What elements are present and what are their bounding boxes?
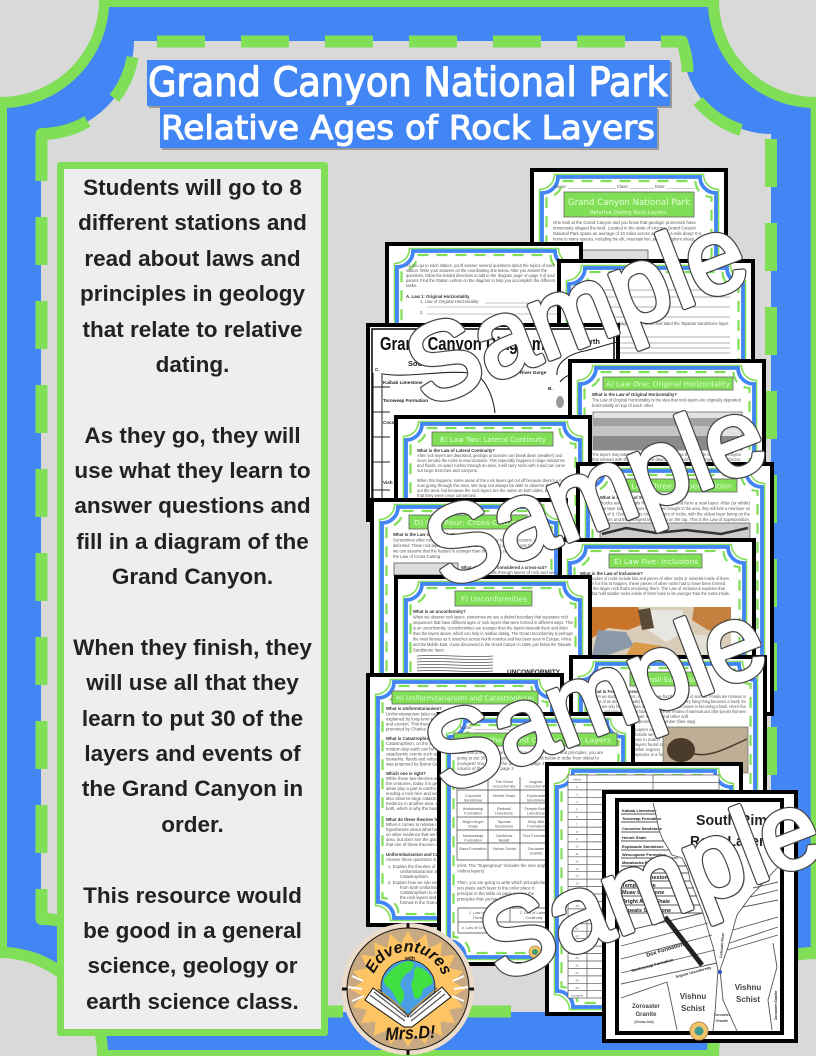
text block: description: science, geology or: [87, 953, 298, 978]
page: Uniformitarianism and Catastrophism: [368, 675, 562, 925]
page: South Rim rock layers: Muav Limestone: [622, 890, 664, 896]
page: dating rock layers worksheet: youngest! You can use the diagram on page 3 to help. Write them in the first: [457, 761, 602, 766]
page: station questions one: [387, 244, 581, 494]
watermark: Sample 3: Sample: [409, 576, 781, 815]
page: Law Four: Sometimes after rock layers form, they may be split by faults, intrusions, or: [393, 538, 539, 542]
page: Unconformities: UNCONFORMITY: [507, 669, 561, 676]
page: Law Two: and floods. As water rushes through an area, it will carry rocks with it and can carve: [417, 463, 566, 468]
text block: description: the Grand Canyon in: [82, 776, 303, 801]
page: dating rock layers worksheet: Formation: [464, 838, 482, 842]
page: dating rock layers worksheet: principle in the table on page 2 using the: [457, 891, 535, 896]
logo text: with: [404, 956, 415, 962]
page: Uniformitarianism and Catastrophism: and erosion. This theory was: [386, 722, 441, 726]
page: Law Five: What is the Law of Inclusions?: [580, 571, 643, 576]
page: ordering table: 28: [575, 978, 579, 982]
page: ordering table: 19: [575, 912, 579, 916]
text block: description: answer questions and: [74, 493, 311, 518]
page: Law One: The Law of Original Horizontality is the idea that rock layers are originally deposited: [592, 398, 742, 402]
page: Fossil Succession: tissues that are perfectly preserved in amber (free sap).: [591, 719, 697, 724]
logo text: Edventures: [366, 942, 450, 974]
page: South Rim rock layers: Hermit Shale: [622, 835, 647, 840]
page: ordering table: 13: [575, 867, 579, 871]
page: Law Five: Some bodies of rocks include bits and pieces of other rocks or minerals inside of them.: [580, 576, 730, 581]
page: ordering table: 2: [576, 785, 578, 789]
page: ordering table: 6: [576, 815, 578, 819]
text block: description: order.: [161, 812, 224, 837]
page: Uniformitarianism and Catastrophism: cataclysmic events such as: [386, 752, 438, 756]
page: South Rim rock layers: Wescogame Formation: [622, 852, 666, 857]
page: Fossil Succession: G) Fossil Succession: [634, 675, 699, 684]
page: dating rock layers worksheet: Formation: [464, 810, 482, 816]
page: South Rim rock layers: Angular Unconformity: [675, 966, 712, 979]
page: ordering table: 9: [576, 837, 578, 841]
page: ordering table: 14: [575, 874, 579, 878]
page: dating rock layers worksheet: Continuity: [525, 915, 543, 920]
page: Law Five: In order for this to happen, these pieces of other rocks had to have been formed: [580, 581, 726, 586]
logo text: Mrs.D!: [385, 1022, 436, 1044]
page: station questions two: On your diagram, find, draw and label the Tapeats Sandstone layer.: [601, 321, 729, 326]
page: station questions one: packet. Find the Station Letters on the diagram to help you accomplish the different: [406, 278, 556, 283]
text block: description: fill in a diagram of the: [76, 529, 309, 554]
page: Uniformitarianism and Catastrophism: Uniformitarianism (also called Gradualism): [386, 712, 468, 716]
page: Law Two: [396, 417, 590, 667]
page: Uniformitarianism and Catastrophism: Uniformitarianism and: [400, 869, 442, 874]
page: dating rock layers worksheet: Sandstone: [464, 798, 482, 802]
page: dating rock layers worksheet: Temple Butte: [525, 806, 547, 811]
page: ordering table: [547, 764, 741, 1014]
page: dating rock layers worksheet: Bass Formation: [459, 846, 487, 851]
page: Law Four: When magma cuts through layers of rock and see a rock: [461, 570, 570, 575]
page: Unconformities: When we observe rock layers, sometimes we see a distinct boundary that separates rock: [413, 614, 569, 620]
logo: Edventures with Mrs. D: [342, 923, 474, 1055]
page: ordering table: Oldest: [573, 778, 582, 782]
page: South Rim rock layers: Granite: [635, 1012, 657, 1018]
page: dating rock layers worksheet: Limestone: [495, 810, 513, 816]
page: Uniformitarianism and Catastrophism: H) Uniformitarianism and Catastrophism: [396, 694, 534, 702]
page: Fossil Succession: use to match: [635, 737, 660, 742]
page: Law Two: What is the Law of Lateral Continuity?: [417, 448, 495, 453]
page: Uniformitarianism and Catastrophism: evidence in another area, we can: [386, 801, 450, 806]
page: dating rock layers worksheet: Watahomigi: [463, 806, 483, 811]
text block: description: dating.: [156, 352, 229, 377]
page: Uniformitarianism and Catastrophism: modern-day earth can be explained: [386, 746, 454, 752]
text block: description: different stations and: [78, 210, 307, 235]
page: ordering table: 27: [575, 971, 579, 975]
page: Uniformitarianism and Catastrophism: While these two theories seem: [386, 776, 445, 781]
page: ordering table: 3: [576, 792, 578, 796]
page: Fossil Succession: fossils are only found in certain layers, especially when it comes to becoming a fossil. Here's five: [591, 704, 747, 709]
page: ordering table: 20: [575, 919, 579, 923]
page: Law Two: When this happens, some areas of the rock layers get cut off because there's a river: [417, 478, 568, 483]
text block: description: be good in a general: [83, 918, 302, 943]
page: Grand Canyon diagram: River Gorge: [520, 370, 547, 375]
page: Uniformitarianism and Catastrophism: Catastrophism.: [400, 874, 429, 879]
page: Law Three: that layer hardens, if more minerals are brought to the area, they will form a new layer on: [600, 506, 751, 511]
page: Law Four: D) Law Four: Cross-Cutting: [414, 518, 522, 527]
page: ordering table: 21: [575, 926, 579, 930]
text block: description: As they go, they will: [84, 423, 301, 448]
page: South Rim rock layers: Esplanade Sandstone: [622, 844, 664, 849]
page: Uniformitarianism and Catastrophism: the centuries, today it is generally: [386, 781, 451, 786]
page: South Rim rock layers: (Cross-Cut): [634, 1020, 654, 1024]
page: South Rim rock layers: Schist: [736, 995, 760, 1004]
page: dating rock layers worksheet: Then, you are going to write which principle/law: [457, 880, 548, 885]
text block: description: that relate to relative: [82, 316, 303, 342]
page: Uniformitarianism and Catastrophism: hypothesize about what happened: [386, 827, 452, 832]
page: Unconformities: F) Unconformities: [461, 594, 527, 604]
page: South Rim rock layers: Zoroaster: [632, 1004, 660, 1010]
page: ordering table: 5: [576, 808, 578, 812]
title: Grand Canyon National Park: [148, 60, 669, 106]
page: cover worksheet: home to many species, including the elk, mountain lion, javelina, bighorn sheep, and: [553, 236, 704, 242]
page: dating rock layers worksheet: going to put 30 of the layers and events listed below in order from oldest to: [457, 756, 599, 760]
page: dating rock layers worksheet: column of the table on page 2: [457, 766, 514, 771]
icon: open book: [365, 987, 451, 1027]
page: cover worksheet: Grand Canyon National Park: [568, 198, 691, 208]
text block: description: learn to put 30 of the: [82, 706, 303, 731]
page: South Rim rock layers: South Rim: [696, 813, 767, 829]
page: Uniformitarianism and Catastrophism: area, but don't see the glacier: [386, 837, 443, 842]
page: dating rock layers worksheet: [439, 714, 633, 964]
page: Uniformitarianism and Catastrophism: Uniformitarianism and Catastrophism: [386, 852, 463, 857]
icon: globe: [381, 960, 435, 1014]
text block: description: use what they learn to: [74, 458, 311, 483]
page: dating rock layers worksheet: Vishnu Schist: [492, 846, 517, 851]
page: dating rock layers worksheet: Sandstone: [495, 824, 513, 828]
page: Grand Canyon diagram: C.: [375, 367, 380, 372]
text block: description: When they finish, they: [73, 635, 312, 660]
page: Uniformitarianism and Catastrophism: Catastrophism to explain: [400, 890, 448, 895]
page: dating rock layers worksheet: Zoroaster: [528, 846, 545, 851]
page: Law Three: What is the Law of Superposition?: [600, 495, 671, 500]
page: ordering table: 7: [576, 822, 578, 826]
page: Uniformitarianism and Catastrophism: Answer these questions in your: [386, 857, 446, 862]
page: South Rim rock layers: Vishnu: [735, 983, 761, 992]
page: station questions one: 2.: [420, 310, 424, 315]
page: dating rock layers worksheet: Unconformity: [525, 784, 548, 788]
page: South Rim rock layers: Rock Layers: [690, 834, 772, 850]
page: dating rock layers worksheet: Redwall: [497, 806, 511, 811]
page: Uniformitarianism and Catastrophism: the rock layers and features: [400, 895, 453, 900]
page: Law Two: After rock layers are deposited, geologic processes can break down (weather) and: [417, 453, 563, 458]
title: Relative Ages of Rock Layers: [161, 108, 655, 147]
page: South Rim rock layers: Manakacha Formation: [622, 860, 665, 865]
page: dating rock layers worksheet: 2. Law of Lateral: [520, 910, 549, 915]
page: Law Three: top of it. Over time this creates layers of rocks, with the oldest layer being on the: [600, 512, 751, 516]
page: Uniformitarianism and Catastrophism: Catastrophism, on the other: [386, 741, 440, 746]
page: ordering table: 8: [576, 830, 578, 834]
page: Law Two: out large trenches and canyons.: [417, 468, 478, 473]
page: dating rock layers worksheet: The Great: [495, 779, 514, 784]
page: ordering table: 11: [575, 852, 579, 856]
page: Unconformities: the most famous as it stretches across North America and has been seen in Europe, Africa: [413, 636, 572, 642]
page: station questions one: 1. Law of Original Horizontality:: [420, 299, 479, 304]
watermark: Sample 2: Sample: [409, 371, 781, 610]
page: cover worksheet: National Park spans an average of 10 miles across and up to a mile deep! It is: [553, 231, 702, 236]
watermark: Sample 1: Sample: [390, 189, 762, 428]
page: Law One: The layers may later become tilted or deformed, but the principle still holds as layers: [592, 452, 741, 457]
page: dating rock layers worksheet: Hermit Shale: [493, 793, 515, 798]
watermark: Sample 1: Sample: [390, 189, 762, 428]
page: dating rock layers worksheet: you place each layer in the order place it: [457, 886, 535, 890]
page: Unconformities: Sandstone layer.: [413, 648, 445, 652]
page: dating rock layers worksheet: Tapeats: [497, 819, 511, 824]
page: Uniformitarianism and Catastrophism: explained by long-term processes: [386, 716, 450, 722]
page: Law One: What is the Law of Original Horizontality?: [592, 392, 677, 397]
page: dating rock layers worksheet: Bright Angel: [463, 819, 484, 824]
page: Law Three: bottom and the youngest layer being on the top. This is the Law of Superposition.: [600, 517, 750, 522]
page: Grand Canyon diagram: Coconino: [383, 420, 404, 425]
page: Uniformitarianism and Catastrophism: also observe large catastrophic: [386, 796, 446, 801]
page: Uniformitarianism and Catastrophism: was proposed by Baron Georges: [386, 762, 449, 766]
page: South Rim rock layers: Redwall Limestone: [622, 875, 671, 881]
page: South Rim rock layers: Kaibab Limestone: [622, 808, 657, 813]
page: dating rock layers worksheet: 4. Law of Cross-Cutting: [462, 925, 502, 930]
page: South Rim rock layers: Temple Butte: [622, 883, 656, 889]
page: Law Three: [578, 464, 772, 714]
page: dating rock layers worksheet: Vishnu layers): [457, 868, 485, 874]
page: Law Four: deformed. These rock layers have something that comes along and cross-cuts them,: [393, 543, 538, 548]
page: Uniformitarianism and Catastrophism: that one of these theories is: [386, 842, 439, 847]
page: dating rock layers worksheet: Esplanade: [527, 793, 545, 798]
page: Grand Canyon diagram: North: [580, 337, 600, 346]
page: dating rock layers worksheet: Nankoweap: [463, 833, 483, 838]
page: Law Two: now going through the area. We may not always be able to observe the swiping: [417, 483, 568, 488]
page: Law Two: B) Law Two: Lateral Continuity: [440, 435, 547, 444]
page: dating rock layers worksheet: Dating the Grand Canyon Rock Layers: [461, 736, 611, 744]
page: Law Five: rocks that hold smaller rocks inside of them have to be younger than the rocks inside.: [580, 591, 730, 596]
page: dating rock layers worksheet: Sixty Mile: [528, 819, 544, 824]
page: ordering table: 10: [575, 844, 579, 848]
page: dating rock layers worksheet: Coconino: [465, 793, 481, 798]
page: Law Five: E) Law Five: Inclusions: [614, 557, 698, 566]
page: Law Three: Rocks and minerals harden into rock and form a new layer. After (or while): [600, 500, 751, 506]
photo: rock inclusions: [592, 607, 731, 655]
page: ordering table: 4: [576, 800, 578, 804]
text block: description: This resource would: [83, 882, 302, 908]
page: South Rim rock layers: Dox Formation: [646, 942, 685, 959]
page: ordering table: Youngest: [571, 994, 583, 998]
page: dating rock layers worksheet: Sandstone: [527, 798, 545, 802]
page: Uniformitarianism and Catastrophism: eroding a rock face and we can: [386, 791, 446, 796]
page: Fossil Succession: When we study rock layers, sometimes we find the remains of animals. Fossils are remains or: [591, 694, 746, 699]
page: dating rock layers worksheet: Formation: [527, 824, 545, 828]
page: Uniformitarianism and Catastrophism: on other evidence that we have: [386, 832, 446, 837]
page: dating rock layers worksheet: Shale: [468, 824, 478, 828]
page: Grand Canyon diagram: Kaibab Limestone: [383, 380, 423, 385]
page: Unconformities: What is an unconformity?: [413, 609, 466, 614]
text block: description: layers and events of: [84, 741, 301, 766]
page: South Rim rock layers: [604, 792, 796, 1041]
page: station questions one: As you go to each station, you'll answer several questions about the topics of each: [406, 263, 556, 268]
page: South Rim rock layers: Zoroaster: [714, 1013, 731, 1017]
page: dating rock layers worksheet: Granite: [530, 850, 542, 856]
page: Uniformitarianism and Catastrophism: both, which is why the basic ideas: [386, 806, 451, 811]
page: Law Two: move (erode) the rocks to new locations. This especially happens in large rainstorms: [417, 458, 565, 463]
page: South Rim rock layers: Vishnu: [680, 992, 706, 1001]
page: Grand Canyon diagram: [368, 325, 618, 522]
page: dating rock layers worksheet: Unconformity: [493, 784, 516, 788]
page: station questions two: [559, 261, 753, 511]
page: ordering table: 26: [575, 964, 579, 968]
page: South Rim rock layers: Toroweap Formation: [622, 816, 662, 821]
page: Law One: A) Law One: Original Horizontality: [606, 380, 731, 388]
page: Uniformitarianism and Catastrophism: from both Uniformitarianism: [400, 885, 453, 890]
page: South Rim rock layers: Nankoweap Formation: [631, 957, 674, 973]
page: Unconformities: and the Middle East. It was discovered in the Grand Canyon in 1869, just below the Tapeats: [413, 642, 571, 647]
page: South Rim rock layers: Colorado River: [719, 932, 725, 958]
page: ordering table: 17: [575, 896, 579, 900]
page: Fossil Succession: layers found in: [635, 742, 664, 747]
page: Law Four: [372, 500, 570, 750]
page: Law One: horizontally on top of each other.: [592, 403, 654, 408]
page: Law One: [570, 361, 764, 611]
page: dating rock layers worksheet: principles that you've discussed here:: [457, 896, 528, 902]
page: cover worksheet: [532, 170, 726, 420]
page: ordering table: 16: [575, 889, 579, 893]
page: station questions one: tasks.: [406, 283, 417, 288]
page: cover worksheet: immensely shaped the land. Located in the state of Arizona, Grand Canyon: [553, 226, 696, 230]
page: Law Four: the Law of Cross-Cutting.: [393, 554, 441, 559]
page: Law Four: What is the Law of Cross-Cutting?: [393, 532, 464, 537]
text block: description: Grand Canyon.: [112, 564, 273, 589]
page: dating rock layers worksheet: Now that you have an understanding of all these laws and principles, you are: [457, 750, 604, 755]
page: Grand Canyon diagram: Vish: [383, 480, 393, 485]
page: Grand Canyon diagram: B.: [548, 386, 553, 391]
page: ordering table: 29: [575, 986, 579, 990]
page: ordering table: 24: [575, 949, 579, 953]
page: Uniformitarianism and Catastrophism: What is Uniformitarianism?: [386, 706, 442, 711]
page: Uniformitarianism and Catastrophism: 1. Explain the theories of: [388, 864, 436, 869]
photo: fossil ray: [663, 727, 748, 773]
page: Fossil Succession: species is a fossil: [635, 752, 668, 757]
page: ordering table: 25: [575, 956, 579, 960]
page: ordering table: 12: [575, 860, 579, 864]
page: Uniformitarianism and Catastrophism: tsunamis, floods and volcanoes: [386, 756, 446, 762]
page: Uniformitarianism and Catastrophism: Which one is right?: [386, 771, 426, 776]
page: Grand Canyon diagram: South: [408, 359, 430, 368]
page: South Rim rock layers: Tapeats Sandstone: [622, 908, 671, 914]
title: [147, 60, 672, 150]
page: Unconformities: than the layers above, which can help in relative dating. The Great Unconformity is perhaps: [413, 631, 573, 636]
page: Law Five: before the larger rock that's enclosing them. The Law of Inclusions explains that: [580, 586, 726, 591]
page: ordering table: 15: [575, 882, 579, 886]
text block: description: will use all that they: [86, 670, 299, 695]
page: Law Four: we can assume that the feature is younger than the rocks it cuts across. This is: [393, 548, 538, 554]
page: Fossil Succession: traces of an animal (animals) that lived long ago. Not every living thing becomes a fossil. Ex: [591, 699, 747, 704]
page: Fossil Succession: What is Fossil Succession?: [591, 689, 648, 694]
page: Uniformitarianism and Catastrophism: formed in the Grand Canyon: [400, 900, 455, 905]
text block: description: [73, 175, 312, 1014]
page: station questions one: questions, follow the bolded directions to add to the 'diagram page' on page 3 of your: [406, 273, 556, 278]
watermark: Sample 3: Sample: [409, 576, 781, 815]
page: Unconformities: is an unconformity. Unconformities are younger than the layers beneath them and older: [413, 626, 569, 630]
page: cover worksheet: Relative Dating Rock Layers: [590, 210, 666, 216]
page: South Rim rock layers: Granite: [716, 1019, 728, 1023]
page: Uniformitarianism and Catastrophism: 2. Explain how we can use: [388, 880, 439, 885]
text block: description: principles in geology: [80, 281, 305, 306]
page: Grand Canyon diagram: Toroweap Formation: [383, 398, 428, 403]
page: Law Three: C) Law Three: Superposition: [620, 482, 732, 490]
page: Uniformitarianism and Catastrophism: What is Catastrophism?: [386, 736, 436, 741]
page: Unconformities: [396, 577, 590, 827]
page: South Rim rock layers: Bright Angel Shale: [622, 899, 670, 905]
page: ordering table: 23: [575, 942, 579, 946]
text block: description: read about laws and: [84, 246, 301, 271]
page: Fossil Succession: of these and some species that have lived. There are remains of mammals and other species that were: [591, 709, 746, 714]
page: dating rock layers worksheet: Name: _____________________________: [460, 725, 544, 730]
page: Law Two: out the area, but because the rock layers are the same on both sides, we can infer: [417, 488, 568, 493]
page: Fossil Succession: covered and preserved their skin, fur and other soft: [591, 714, 689, 719]
page: dating rock layers worksheet: Cardenas: [496, 833, 512, 838]
page: Law One: that interact with the surface were deposited flat and later changed by the forces.: [592, 457, 741, 462]
page: dating rock layers worksheet: (Hint: The "Supergroup" includes the nine angled: [457, 863, 551, 868]
page: Uniformitarianism and Catastrophism: What do these theories have: [386, 817, 445, 822]
page: ordering table: 22: [575, 934, 579, 938]
page: dating rock layers worksheet: Dox Formation: [523, 833, 549, 838]
text block: description: earth science class.: [86, 989, 299, 1014]
page: Unconformities: sequences that have different ages or rock layers that were formed in different ways. This: [413, 620, 573, 625]
page: dating rock layers worksheet: Horizontality: [473, 915, 495, 920]
page: Law Five: [560, 540, 754, 790]
page: Fossil Succession: other regions: [635, 747, 660, 752]
page: Fossil Succession: [571, 657, 765, 907]
page: Law Four: What else can be considered a cross-cut?: [461, 565, 547, 570]
page: Uniformitarianism and Catastrophism: When it comes to relative dating: [386, 822, 448, 827]
page: ordering table: 18: [575, 904, 579, 908]
page: station questions one: station. Write your answers on the coordinating line below. After you answer the: [406, 268, 548, 273]
page: Grand Canyon diagram: Grand Canyon Diagram: [380, 334, 545, 354]
page: South Rim rock layers: Coconino Sandstone: [622, 826, 663, 831]
page: Fossil Succession: fossils we can: [635, 732, 662, 737]
logo text: [366, 942, 450, 1044]
page: cover worksheet: One look at the Grand Canyon and you know that geologic processes have: [553, 220, 696, 225]
page: station questions one: A. Law 1: Original Horizontality: [406, 294, 470, 299]
page: Fossil Succession: Layers contain: [635, 727, 664, 732]
page: Uniformitarianism and Catastrophism: promoted by Charles Lyell: [386, 726, 436, 732]
page: dating rock layers worksheet: Basalt: [499, 838, 510, 842]
page: dating rock layers worksheet: 1. Law of Original: [469, 910, 499, 915]
page: Law Two: that they were once connected.: [417, 493, 477, 498]
panel: description text: [57, 162, 328, 1036]
page: South Rim rock layers: Zoroaster Granite: [774, 991, 778, 1020]
page: South Rim rock layers: Schist: [681, 1004, 705, 1013]
page: dating rock layers worksheet: Limestone: [527, 810, 545, 816]
watermark: Sample 2: Sample: [409, 371, 781, 610]
page: Uniformitarianism and Catastrophism: ideas play a part in earth's: [386, 786, 436, 791]
page: cover worksheet: Name: ____________________ Class: __________ Date: ____________: [554, 184, 696, 189]
page: dating rock layers worksheet: Angular: [529, 779, 543, 784]
text block: description: Students will go to 8: [83, 175, 302, 200]
